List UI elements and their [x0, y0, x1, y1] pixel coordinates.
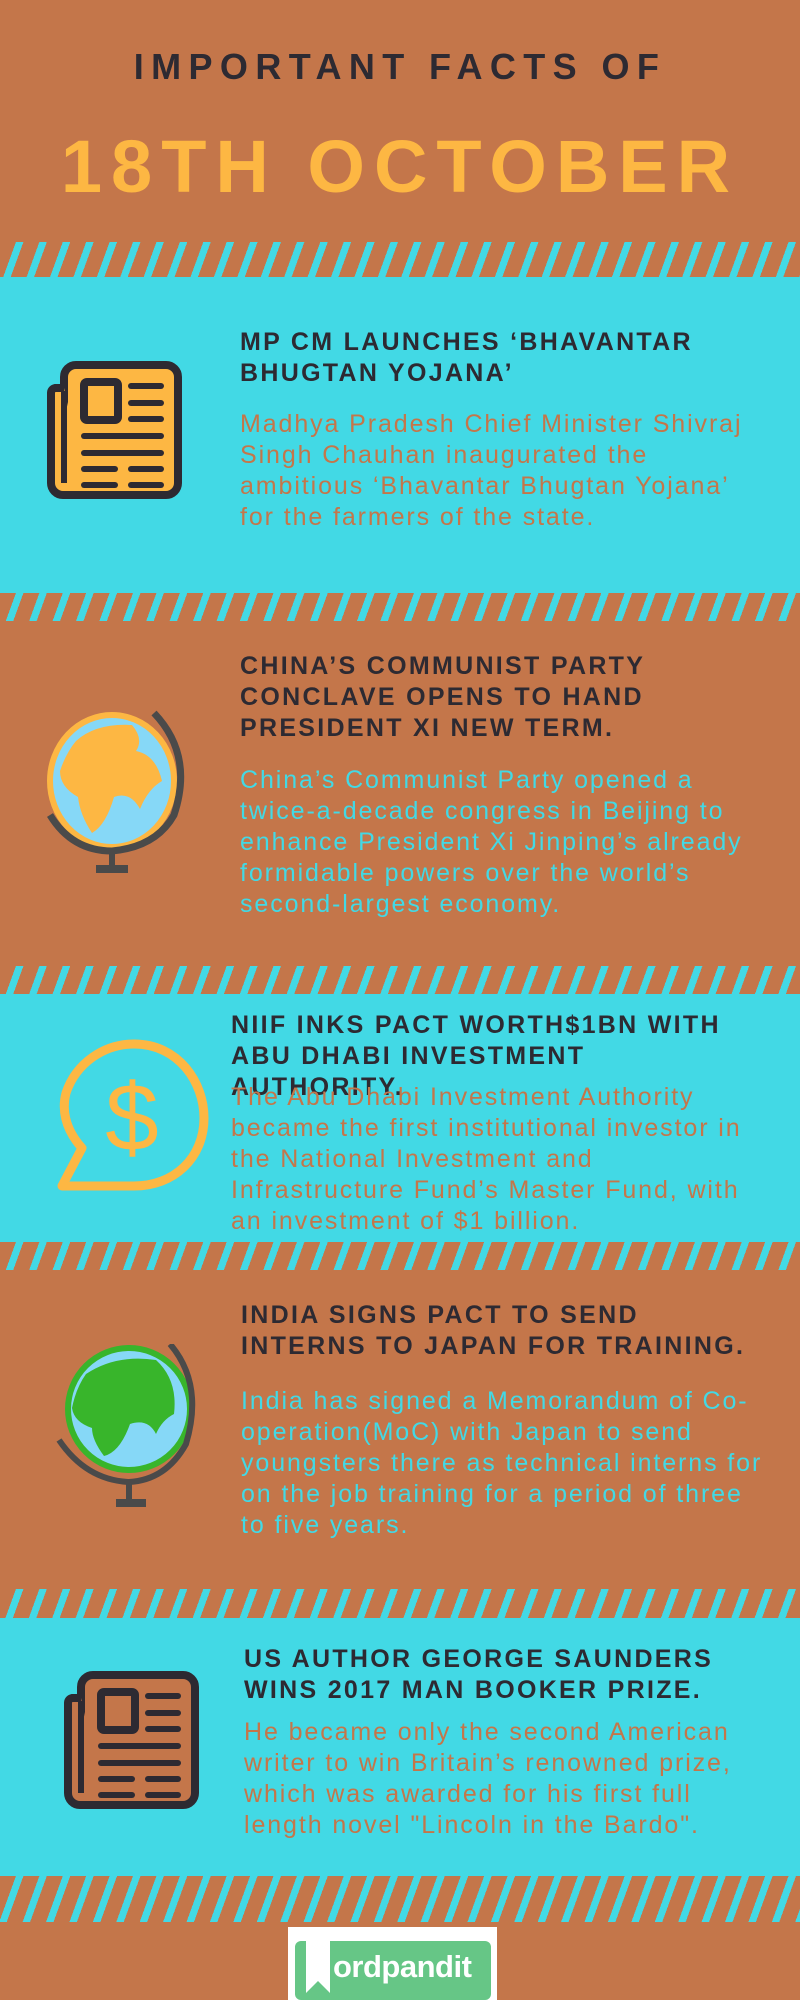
- body 3: became the first institutional investor in: [231, 1114, 742, 1142]
- heading 1: [240, 328, 693, 387]
- body 1: Singh Chauhan inaugurated the: [240, 441, 648, 469]
- body 4: India has signed a Memorandum of Co-: [241, 1387, 749, 1415]
- body 2: formidable powers over the world’s: [240, 859, 690, 887]
- body 1: [240, 410, 742, 531]
- icon: globe yellow: [47, 710, 184, 873]
- panel 4: [0, 1270, 800, 1589]
- panel 5: [0, 1618, 800, 1876]
- panel 2: [0, 621, 800, 966]
- heading 2: PRESIDENT XI NEW TERM.: [240, 714, 614, 742]
- heading 4: INDIA SIGNS PACT TO SEND: [241, 1301, 639, 1329]
- body 4: youngsters there as technical interns for: [241, 1449, 762, 1477]
- body 3: an investment of $1 billion.: [231, 1207, 580, 1235]
- footer logo: [288, 1927, 497, 2000]
- heading 4: INTERNS TO JAPAN FOR TRAINING.: [241, 1332, 745, 1360]
- title line 2: 18TH OCTOBER: [61, 125, 739, 208]
- heading 3: NIIF INKS PACT WORTH$1BN WITH: [231, 1011, 721, 1039]
- body 4: operation(MoC) with Japan to send: [241, 1418, 693, 1446]
- body 5: which was awarded for his first full: [244, 1780, 692, 1808]
- icon: newspaper: [47, 361, 182, 499]
- body 1: Madhya Pradesh Chief Minister Shivraj: [240, 410, 742, 438]
- heading 5: [244, 1645, 713, 1704]
- icon: dollar speech bubble: $: [105, 1064, 159, 1171]
- heading 1: BHUGTAN YOJANA’: [240, 359, 514, 387]
- body 3: Infrastructure Fund’s Master Fund, with: [231, 1176, 740, 1204]
- body 5: He became only the second American: [244, 1718, 730, 1746]
- heading 2: [240, 652, 645, 742]
- heading 1: MP CM LAUNCHES ‘BHAVANTAR: [240, 328, 693, 356]
- heading 4: [241, 1301, 745, 1360]
- body 3: The Abu Dhabi Investment Authority: [231, 1083, 694, 1111]
- heading 2: CONCLAVE OPENS TO HAND: [240, 683, 644, 711]
- body 2: China’s Communist Party opened a: [240, 766, 694, 794]
- body 4: [241, 1387, 762, 1539]
- title line 1: IMPORTANT FACTS OF: [134, 46, 666, 87]
- panel 1: [0, 277, 800, 593]
- body 4: to five years.: [241, 1511, 409, 1539]
- heading 3: [231, 1011, 721, 1101]
- heading 2: CHINA’S COMMUNIST PARTY: [240, 652, 645, 680]
- icon: newspaper brown: [64, 1671, 199, 1809]
- body 5: length novel "Lincoln in the Bardo".: [244, 1811, 700, 1839]
- body 4: on the job training for a period of three: [241, 1480, 743, 1508]
- body 2: twice-a-decade congress in Beijing to: [240, 797, 724, 825]
- heading 3: ABU DHABI INVESTMENT: [231, 1042, 585, 1070]
- body 2: [240, 766, 743, 918]
- body 1: ambitious ‘Bhavantar Bhugtan Yojana’: [240, 472, 730, 500]
- heading 5: US AUTHOR GEORGE SAUNDERS: [244, 1645, 713, 1673]
- body 2: second-largest economy.: [240, 890, 561, 918]
- body 5: [244, 1718, 732, 1839]
- panel 3: [0, 994, 800, 1242]
- body 1: for the farmers of the state.: [240, 503, 595, 531]
- body 3: [231, 1083, 742, 1235]
- body 5: writer to win Britain’s renowned prize,: [244, 1749, 732, 1777]
- body 3: the National Investment and: [231, 1145, 594, 1173]
- heading 3: AUTHORITY.: [231, 1073, 404, 1101]
- header panel: [0, 0, 800, 242]
- footer logo: ordpandit: [333, 1949, 471, 1984]
- icon: globe green: [56, 1344, 196, 1507]
- body 2: enhance President Xi Jinping’s already: [240, 828, 743, 856]
- icon: dollar speech bubble: [58, 1040, 208, 1190]
- heading 5: WINS 2017 MAN BOOKER PRIZE.: [244, 1676, 702, 1704]
